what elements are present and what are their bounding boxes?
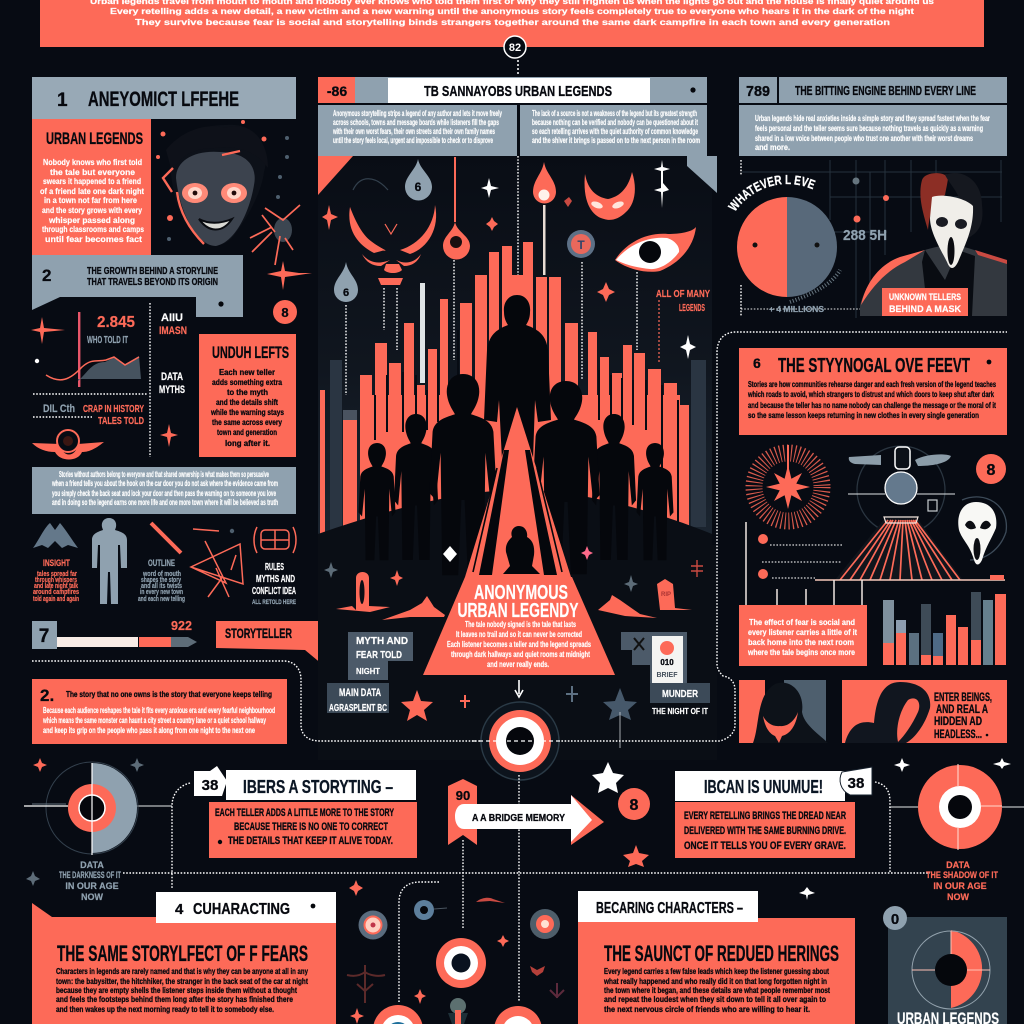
text block: coral list: around campfires	[33, 589, 79, 596]
panel: title pyramid: Each listener becomes a teller and the legend spreads	[447, 639, 591, 649]
heading tab: CUHARACTING	[193, 901, 290, 918]
label: left slate notes: AGRASPLENT BC	[329, 703, 387, 714]
label: left slate notes: NIGHT	[356, 667, 380, 676]
icon: watching eye	[615, 227, 696, 350]
text block: right intro: and more.	[755, 142, 790, 152]
icon: bat	[33, 523, 78, 548]
panel: characters right: the town where it began, and these details are what people remember most	[604, 985, 830, 995]
icon: coral small star	[623, 845, 649, 867]
side labels: DATA	[161, 371, 183, 383]
number badge: 8	[273, 300, 297, 324]
connector: left dotted path	[32, 661, 482, 741]
text block: left intro: with their own worst fears, their own streets and their own family names	[332, 126, 495, 136]
figure: mid right	[592, 414, 636, 560]
panel: title pyramid: ANONYMOUS	[474, 582, 568, 604]
panel: section 2 strip: and keep its grip on the people who pass it along from one night to the next one	[43, 725, 255, 735]
text block: slate list: shapes the story	[141, 577, 181, 584]
figure: kneeling child	[503, 526, 540, 574]
decor: dim glyphs	[347, 880, 815, 1024]
text block: slate list: and each new telling	[138, 596, 185, 603]
label: left slate notes: MAIN DATA	[339, 687, 381, 699]
chart: left donut target: THE DARKNESS OF IT	[59, 870, 121, 880]
panel: characters right	[578, 891, 855, 1024]
text block: coral note	[739, 605, 867, 666]
label: right slate notes with card: BRIEF	[656, 672, 678, 679]
text block: coral list: INSIGHT	[43, 558, 70, 568]
text block: urban legends: through classrooms and camps	[42, 224, 144, 234]
chart: right donut target	[894, 758, 1011, 902]
panel: title pyramid: URBAN LEGENDY	[458, 600, 579, 622]
icon: left eye orb	[358, 910, 388, 940]
text block: coral list	[33, 558, 79, 603]
panel: center heading	[318, 77, 717, 195]
illustration: silhouettes	[359, 295, 673, 575]
progress bar: section 7: 7	[39, 626, 49, 647]
chart: area growth: DIL Cth	[43, 403, 75, 415]
icon: triangle glyph	[191, 529, 243, 597]
panel: slate text strip: you simply check the back seat and lock your door and then pass the warning on to someone you love	[52, 488, 276, 498]
icon: coral star	[401, 690, 433, 721]
icon: lantern	[448, 998, 468, 1024]
heading: section 1: 1	[57, 90, 68, 111]
label: right slate notes with card: MUNDER	[662, 689, 699, 700]
text block: coral note	[209, 802, 417, 858]
text block: coral note: EACH TELLER ADDS A LITTLE MORE TO THE STORY	[215, 807, 394, 819]
panel: section 2 strip: Because each audience reshapes the tale it fits every anxious era and every fearful neighbourhood	[43, 705, 275, 715]
progress bar: section 7: 922	[171, 618, 192, 633]
progress bar: section 7	[32, 618, 197, 649]
text block: right intro: The lack of a source is not a weakness of the legend but its greatest strength	[532, 108, 697, 118]
panel: characters right: and repeat the loudest when they sit down to tell it all over again to	[604, 994, 826, 1004]
text block: urban legends: URBAN LEGENDS	[46, 129, 143, 148]
chart: right donut target: IN OUR AGE	[933, 881, 987, 891]
icon: ghost mask	[958, 497, 1006, 564]
figure: far left	[359, 443, 395, 560]
panel: characters right: what really happened and who really did it on that long forgotten night in	[603, 976, 827, 986]
text block: urban legends: whisper passed along	[48, 215, 135, 225]
panel: stories heading left: 38	[202, 777, 218, 794]
label: coral side note: ALL OF MANY	[656, 289, 710, 300]
chart: right donut target: THE SHADOW OF IT	[926, 870, 998, 880]
panel: characters left: and then wakes up the next morning ready to tell it to somebody else.	[56, 1004, 274, 1014]
icon: slate drop with number	[334, 262, 358, 395]
figure: tall left	[429, 374, 497, 575]
center scene: sky backdrop	[318, 156, 712, 545]
text block: coral note: back home into the next room	[748, 637, 854, 647]
icon: mound right	[598, 595, 657, 618]
label: right slate notes with card: THE NIGHT OF IT	[652, 707, 708, 716]
text block: right intro: so each retelling arrives with the quiet authority of common knowledge	[532, 126, 698, 136]
panel: urban lefts callout: UNDUH LEFTS	[212, 343, 289, 362]
text block: coral note: THE DETAILS THAT KEEP IT ALIVE TODAY.	[228, 835, 393, 847]
labels: left and right scene notes	[327, 632, 710, 716]
chart: right donut target: DATA	[946, 860, 970, 870]
panel: characters left: town: the babysitter, the hitchhiker, the stranger in the back seat of the car at night	[56, 976, 308, 986]
text block: urban legends: of a friend late one dark night	[40, 186, 144, 196]
icon: central target	[472, 702, 562, 780]
text block: urban legends: Nobody knows who first told	[43, 157, 142, 167]
heading tab: BECARING CHARACTERS –	[596, 900, 743, 917]
ribbon: badge 90: 90	[456, 788, 470, 803]
icon: grinning face	[156, 120, 289, 246]
icon: coral drop on line	[443, 157, 470, 360]
figure: far right	[637, 443, 673, 560]
panel: title pyramid	[423, 577, 615, 675]
label: coral side note	[656, 289, 710, 362]
callout: coral storyteller flag	[216, 621, 323, 665]
label: coral side note: LEGENDS	[679, 303, 705, 314]
top banner: They survive because fear is social and storytelling binds strangers together around the same dark campfire in each town and every generation	[135, 17, 890, 27]
text block: coral note: DELIVERED WITH THE SAME BURNING DRIVE.	[684, 825, 846, 837]
chart: left donut target: DATA	[80, 860, 104, 870]
chart: left donut target: NOW	[81, 892, 104, 902]
figure: tall right	[532, 381, 600, 574]
icon: mound left	[382, 596, 445, 620]
text block: urban legends: the tale but everyone	[50, 167, 135, 177]
text block: coral list: tales spread far	[37, 571, 77, 578]
connector: right dotted path	[555, 332, 1007, 741]
figure: central tall man	[484, 295, 551, 575]
icon: tombstone right	[657, 579, 692, 610]
icon: slate drop	[405, 159, 432, 200]
panel: characters right: THE SAUNCT OF REDUED HERINGS	[604, 941, 839, 966]
legend: dotted rows	[746, 522, 862, 605]
text block: left intro: Anonymous storytelling strips a legend of any author and lets it move freely	[333, 108, 502, 118]
number badge: top connector: 82	[509, 42, 521, 54]
panel: urban lefts callout: the same across every	[212, 417, 282, 427]
chart: area growth	[31, 303, 150, 457]
text block: right intro	[520, 105, 707, 156]
text block: white list: ALL RETOLD HERE	[252, 600, 296, 606]
text block: slate list: OUTLINE	[148, 558, 175, 568]
text block: white list: RULES	[265, 562, 284, 573]
panel: hooded figure right	[842, 680, 1007, 743]
icon: central eye	[436, 938, 486, 988]
panel: title pyramid: The tale nobody signed is the tale that lasts	[465, 619, 576, 629]
heading: section 1: ANEYOMICT LFFEHE	[88, 88, 239, 111]
text block: coral list: and late night talk	[34, 583, 78, 590]
connector: lower dotted rule	[105, 775, 1024, 1002]
callout: coral storyteller flag: STORYTELLER	[225, 625, 292, 641]
text block: left intro: across schools, towns and message boards while listeners fill the gaps	[333, 117, 499, 127]
icon: shadow devil face	[349, 179, 436, 285]
icon: glowing drop	[533, 162, 556, 275]
panel: center heading: TB SANNAYOBS URBAN LEGENDS	[424, 83, 612, 100]
panel: section 2 tag: 2	[42, 266, 51, 285]
panel: right heading	[739, 77, 1007, 156]
text block: coral list: through whispers	[35, 577, 77, 584]
panel: characters left: because they are empty shells the listener steps inside them without a thought	[56, 985, 297, 995]
number badge: 8 right	[976, 454, 1006, 484]
icon: bracket window	[254, 527, 296, 553]
panel: stories effect: 6	[753, 355, 761, 371]
chart: left donut target	[24, 758, 144, 902]
illustration: device with ray pyramid	[815, 446, 1005, 580]
arrow: large white: A A BRIDGE MEMORY	[472, 813, 565, 824]
chart: area growth: 2.845	[97, 314, 135, 331]
label: right slate notes with card	[621, 632, 710, 716]
panel: hooded figure right: HIDDEN AD	[934, 714, 982, 728]
number badge: top connector	[504, 36, 526, 76]
number badge: 8 right: 8	[987, 462, 996, 479]
heading tab	[156, 892, 336, 923]
text block: coral note: EVERY RETELLING BRINGS THE DREAD NEAR	[684, 810, 846, 822]
panel: stories heading right: 38	[848, 775, 864, 792]
text block: coral note: ONCE IT TELLS YOU OF EVERY GRAVE.	[684, 840, 846, 852]
panel: urban lefts callout: Each new teller	[219, 367, 276, 377]
callout: masked man label	[882, 288, 968, 316]
ground	[318, 490, 717, 760]
icon: slate star	[603, 688, 637, 720]
text block: right intro	[739, 105, 1007, 156]
panel: urban lefts callout	[199, 334, 296, 457]
icons: omens above the city	[322, 157, 710, 395]
chart: pie and grid	[728, 160, 1002, 318]
arc label: WHATEVER L EVE	[728, 174, 816, 211]
panel: hooded figure right: HEADLESS...	[934, 727, 982, 741]
text block: coral list: told again and again	[33, 596, 79, 603]
arrow: large white	[455, 795, 604, 845]
panel: slate text strip: when a friend tells you about the hook on the car door you do not ask where the evidence came from	[51, 478, 278, 488]
icons: lower center eyes	[347, 880, 815, 1024]
text block: coral note: every listener carries a little of it	[748, 627, 857, 637]
icon: bottom rings	[373, 1005, 542, 1024]
number badge: 8: 8	[281, 305, 289, 320]
panel: urban lefts callout: long after it.	[225, 438, 270, 448]
panel: right heading: 789	[746, 83, 770, 100]
panel: stories effect	[739, 348, 1007, 435]
chart: area growth: TALES TOLD	[98, 416, 144, 427]
panel: section 2 tag	[32, 255, 243, 317]
label: right slate notes with card: 010	[660, 658, 674, 667]
chart: stacked bars	[883, 592, 1006, 665]
panel: section 2 strip	[32, 679, 287, 744]
panel: characters left: THE SAME STORYLFECT OF F FEARS	[57, 941, 308, 966]
panel: anonymous legend	[32, 77, 312, 290]
panel: section 2 tag: THAT TRAVELS BEYOND ITS ORIGIN	[87, 277, 218, 288]
panel: urban lefts callout: while the warning stays	[210, 407, 284, 417]
text block: right intro: because nothing can be verified and nobody can be questioned about it	[532, 117, 698, 127]
icon: coral devil mask	[585, 172, 635, 220]
panel: slate text strip	[32, 467, 296, 514]
icon: grave left	[336, 572, 390, 612]
panel: urban lefts callout: to the myth	[227, 387, 268, 397]
chart: right donut target: NOW	[947, 892, 970, 902]
panel: stories heading left	[194, 766, 417, 858]
icon: slate drop with number: 6	[343, 287, 349, 299]
top banner	[40, 0, 984, 47]
pie	[737, 197, 787, 297]
top banner: Every retelling adds a new detail, a new victim and a new warning until the anonymous story feels completely true to everyone who hears it in the dark of the night	[110, 6, 914, 16]
icon: slate drop: 6	[415, 180, 422, 194]
panel: slate text strip: and in doing so the legend earns one more life and one more town where it will be believed as truth	[52, 497, 278, 507]
panel: characters left	[32, 892, 336, 1024]
icon: sparkles	[322, 160, 696, 359]
panel: section 2 strip: 2.	[40, 686, 54, 705]
callout: masked man label: UNKNOWN TELLERS	[889, 292, 961, 302]
panel: hooded figure right: AND REAL A	[936, 702, 988, 716]
side labels	[159, 312, 187, 447]
panel: section 2 tag: THE GROWTH BEHIND A STORYLINE	[87, 266, 218, 277]
text block: urban legends: and the story grows with every	[42, 205, 142, 215]
text block: white list: MYTHS AND	[256, 574, 295, 585]
panel: title pyramid: and never really ends.	[487, 659, 549, 669]
panel: stories heading right: IBCAN IS UNUMUE!	[704, 777, 823, 797]
panel: urban legends donut	[883, 906, 1007, 1024]
panel: center heading: -86	[327, 83, 347, 99]
icon: coral baton	[151, 523, 181, 553]
chart: area growth: WHO TOLD IT	[87, 335, 128, 346]
text block: coral note: where the tale begins once more	[747, 647, 855, 657]
decor: graves and stars: RIP	[661, 592, 671, 598]
figure: mid left	[394, 414, 438, 560]
text block: coral note	[675, 802, 855, 858]
side labels: AIIU	[161, 312, 183, 324]
icon: multicolour orb	[567, 230, 595, 380]
icon: slate ring	[414, 900, 447, 920]
icon: spider	[250, 205, 300, 265]
panel: section 2 strip: The story that no one owns is the story that everyone keeps telling	[66, 690, 272, 699]
text block: coral note: The effect of fear is social and	[749, 617, 855, 627]
callout: masked man label: BEHIND A MASK	[889, 304, 961, 314]
icon: masked man	[860, 173, 1007, 316]
label: left slate notes: MYTH AND	[356, 636, 408, 647]
text block: slate list: and all its twists	[141, 583, 182, 590]
panel: hooded figure left	[739, 680, 828, 743]
chart: pie and grid: 288 5H	[843, 227, 887, 244]
panel: characters left: Characters in legends are rarely named and that is why they can be anyone at all in any	[56, 966, 308, 976]
icon row: symbols	[33, 518, 296, 606]
chart: area growth: CRAP IN HISTORY	[83, 404, 144, 415]
panel: characters right: Every legend carries a few false leads which keep the listener guessing about	[604, 966, 829, 976]
text block: white list: CONFLICT IDEA	[252, 586, 296, 597]
panel: stories heading right	[675, 767, 872, 858]
decor: graves and stars	[324, 546, 703, 748]
text block: white list	[252, 562, 296, 606]
panel: slate text strip: Stories without authors belong to everyone and that shared ownership is what makes them so persuasive	[59, 469, 269, 479]
text block: slate list: word of mouth	[142, 571, 181, 578]
panel: section 2 strip: which means the same monster can haunt a city street a country lane or a quiet school hallway	[42, 715, 266, 725]
panel: characters left: and feels the footsteps behind them long after the story has finished there	[56, 994, 293, 1004]
icon: coral sparkle	[267, 261, 312, 290]
text block: slate list: in every new town	[140, 589, 183, 596]
panel: title pyramid: through dark hallways and quiet rooms at midnight	[451, 649, 590, 659]
text block: urban legends: until fear becomes fact	[45, 234, 142, 244]
label: left slate notes: FEAR TOLD	[356, 650, 402, 661]
panel: urban lefts callout: adds something extra	[212, 377, 282, 387]
heading tab	[578, 891, 758, 922]
panel: urban lefts callout: town and generation	[217, 427, 277, 437]
text block: slate list	[138, 558, 185, 603]
text block: coral note: BECAUSE THERE IS NO ONE TO CORRECT	[234, 821, 388, 833]
panel: stories heading left: IBERS A STORYTING –	[243, 777, 393, 797]
text block: urban legends	[32, 119, 151, 255]
text block: right intro: and the shiver it brings is passed on to the next person in the room	[532, 135, 700, 145]
chart: pie and grid: + 4 MILLIONS	[769, 305, 825, 314]
number badge: 8 center: 8	[630, 797, 639, 814]
text block: left intro	[318, 105, 517, 156]
heading: section 1	[32, 77, 296, 119]
icon: standing person	[92, 518, 127, 604]
text block: urban legends: in a town not far from here	[44, 195, 137, 205]
panel: title pyramid: It leaves no trail and so it can never be corrected	[456, 629, 582, 639]
text block: left intro: until the story feels local, urgent and impossible to check or to disprove	[333, 135, 493, 145]
icon: multicolour orb: T	[577, 238, 585, 252]
panel: characters right: the next nervous circle of friends who are willing to hear it.	[604, 1004, 810, 1014]
ribbon: badge 90	[448, 779, 477, 845]
icon: right eye orb	[530, 909, 560, 939]
panel: urban lefts callout: and the details shift	[216, 397, 278, 407]
side labels: MYTHS	[159, 384, 185, 396]
label: left slate notes	[327, 632, 413, 714]
number badge: 0: 0	[891, 911, 899, 928]
number badge: 8 center	[618, 788, 650, 820]
text block: urban legends: swears it happened to a friend	[43, 176, 141, 186]
icon: sun burst	[754, 445, 822, 521]
side labels: IMASN	[159, 325, 187, 337]
icon: winged eye	[32, 430, 104, 460]
icon: white star	[592, 762, 624, 793]
heading tab: 4	[175, 901, 184, 918]
chart: city bar skyline	[320, 242, 706, 543]
illustration: central light beam	[465, 407, 571, 577]
chart: left donut target: IN OUR AGE	[65, 881, 119, 891]
